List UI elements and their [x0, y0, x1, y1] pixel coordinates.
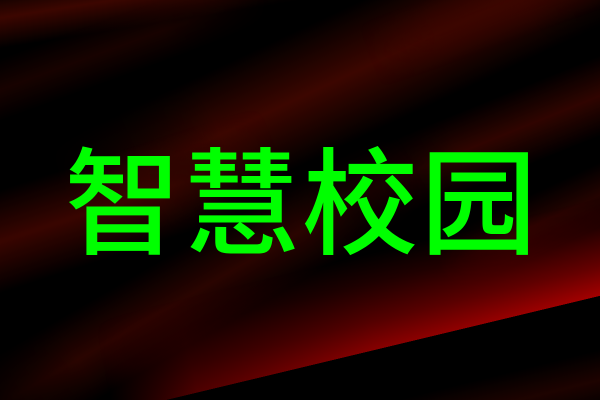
- streak: lower center: [0, 174, 385, 400]
- title: 智慧校园: [65, 140, 539, 270]
- streak: top right: [528, 0, 595, 16]
- streak: right upper glow: [462, 170, 600, 262]
- streak: center diagonal: [101, 0, 600, 190]
- streak: right middle: [372, 63, 600, 198]
- streak: upper left faint: [0, 8, 224, 110]
- streak: left middle: [0, 155, 249, 286]
- streak: top left: [0, 0, 260, 44]
- streak: below main edge: [435, 358, 600, 400]
- streak: main bright red with hard lower edge: [121, 206, 600, 400]
